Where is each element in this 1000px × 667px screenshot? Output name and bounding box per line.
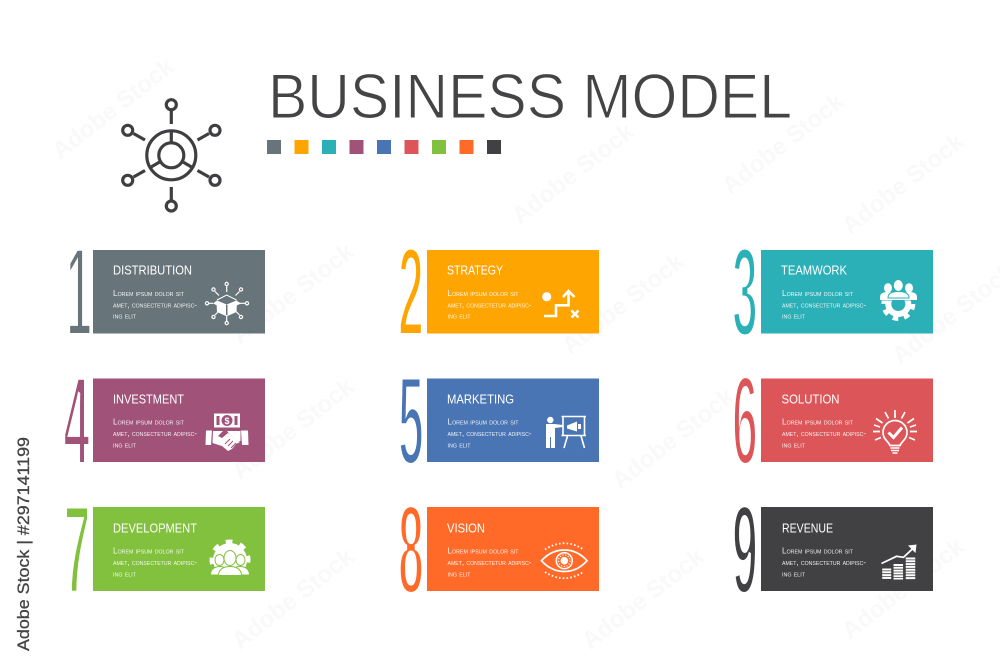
panel: strategy <box>398 222 599 364</box>
text: strategy: Lorem ipsum dolor sit <box>448 289 518 298</box>
text: revenue: Lorem ipsum dolor sit <box>782 546 853 556</box>
text: Adobe Stock <box>577 543 710 655</box>
text: marketing: ing elit <box>448 440 470 450</box>
icon: open box with nodes <box>205 282 249 325</box>
panel: solution <box>732 351 933 493</box>
text: Adobe Stock <box>227 238 360 350</box>
text: development: Lorem ipsum dolor sit <box>113 546 184 556</box>
icon: eye <box>542 543 587 578</box>
number 9: 9 <box>732 480 758 622</box>
text: Adobe Stock <box>507 118 640 230</box>
panel: revenue <box>732 480 933 622</box>
heading: distribution: DISTRIBUTION <box>113 264 192 278</box>
text: Adobe Stock <box>837 128 970 240</box>
panel: vision <box>398 480 599 622</box>
text: Adobe Stock <box>557 248 690 360</box>
card: strategy <box>427 250 599 334</box>
icon: team in front of gear <box>208 538 252 582</box>
text: solution: amet, consectetur adipisc- <box>782 429 866 438</box>
icon: business model network hub <box>123 100 220 211</box>
heading: investment: INVESTMENT <box>113 392 184 406</box>
number 1: 1 <box>66 222 92 364</box>
card: revenue <box>761 507 933 591</box>
text: distribution: ing elit <box>113 312 136 320</box>
panel: distribution <box>66 222 265 364</box>
text: investment: Lorem ipsum dolor sit <box>113 418 184 426</box>
icon: banknote and handshake <box>206 414 248 451</box>
text: Adobe Stock <box>717 88 850 200</box>
card: investment <box>93 378 265 462</box>
heading: marketing: MARKETING <box>447 392 514 406</box>
heading: revenue: REVENUE <box>782 522 833 536</box>
icon: light bulb with check <box>873 410 917 453</box>
number 8: 8 <box>398 480 424 622</box>
text: marketing: Lorem ipsum dolor sit <box>448 418 518 426</box>
text: vision: ing elit <box>448 570 470 578</box>
number 5: 5 <box>398 351 424 493</box>
heading: teamwork: TEAMWORK <box>781 264 848 278</box>
text: Adobe Stock <box>227 373 360 485</box>
number 3: 3 <box>732 222 758 364</box>
text: investment: ing elit <box>113 440 136 450</box>
text: vision: Lorem ipsum dolor sit <box>448 546 518 556</box>
colour swatches <box>267 140 501 154</box>
icon: banknote and handshake: $ <box>224 416 230 426</box>
heading: vision: VISION <box>447 522 485 536</box>
number 6: 6 <box>732 351 758 493</box>
text: strategy: amet, consectetur adipisc- <box>448 300 532 310</box>
text: solution: Lorem ipsum dolor sit <box>782 418 853 426</box>
text: Adobe Stock <box>227 543 360 655</box>
icon: stairs with arrow <box>542 291 578 318</box>
text: revenue: ing elit <box>782 570 805 578</box>
text: solution: ing elit <box>782 440 805 450</box>
text: strategy: ing elit <box>448 312 470 320</box>
panel: marketing <box>398 351 599 493</box>
watermark: stock id: Adobe Stock | #297141199 <box>14 437 33 651</box>
panel: teamwork <box>732 222 933 364</box>
icon: team over gear <box>878 280 919 318</box>
card: marketing <box>427 378 599 462</box>
icon: presenter at board <box>546 416 586 448</box>
heading: solution: SOLUTION <box>782 392 840 406</box>
text: investment: amet, consectetur adipisc- <box>113 429 197 438</box>
number 4: 4 <box>63 351 90 493</box>
panel: investment <box>63 351 265 493</box>
card: teamwork <box>761 250 933 334</box>
text: development: amet, consectetur adipisc- <box>113 558 197 567</box>
heading: development: DEVELOPMENT <box>113 522 197 536</box>
number 2: 2 <box>398 222 424 364</box>
icon: coins and growth arrow <box>882 544 916 580</box>
text: Adobe Stock <box>47 53 180 165</box>
panel: development <box>64 480 265 622</box>
text: teamwork: amet, consectetur adipisc- <box>782 300 866 310</box>
text: development: ing elit <box>113 570 136 578</box>
text: distribution: Lorem ipsum dolor sit <box>113 289 184 298</box>
text: Adobe Stock <box>607 383 740 495</box>
number 7: 7 <box>64 480 90 622</box>
card: development <box>93 507 265 591</box>
text: teamwork: Lorem ipsum dolor sit <box>782 289 853 298</box>
text: Adobe Stock <box>837 533 970 645</box>
text: distribution: amet, consectetur adipisc- <box>113 300 197 310</box>
text: vision: amet, consectetur adipisc- <box>448 558 532 567</box>
text: teamwork: ing elit <box>782 312 805 320</box>
title: BUSINESS MODEL <box>268 62 792 132</box>
card: distribution <box>93 250 265 334</box>
card: solution <box>761 378 933 462</box>
text: marketing: amet, consectetur adipisc- <box>448 429 532 438</box>
text: revenue: amet, consectetur adipisc- <box>782 558 866 567</box>
heading: strategy: STRATEGY <box>447 264 504 278</box>
card: vision <box>427 507 599 591</box>
